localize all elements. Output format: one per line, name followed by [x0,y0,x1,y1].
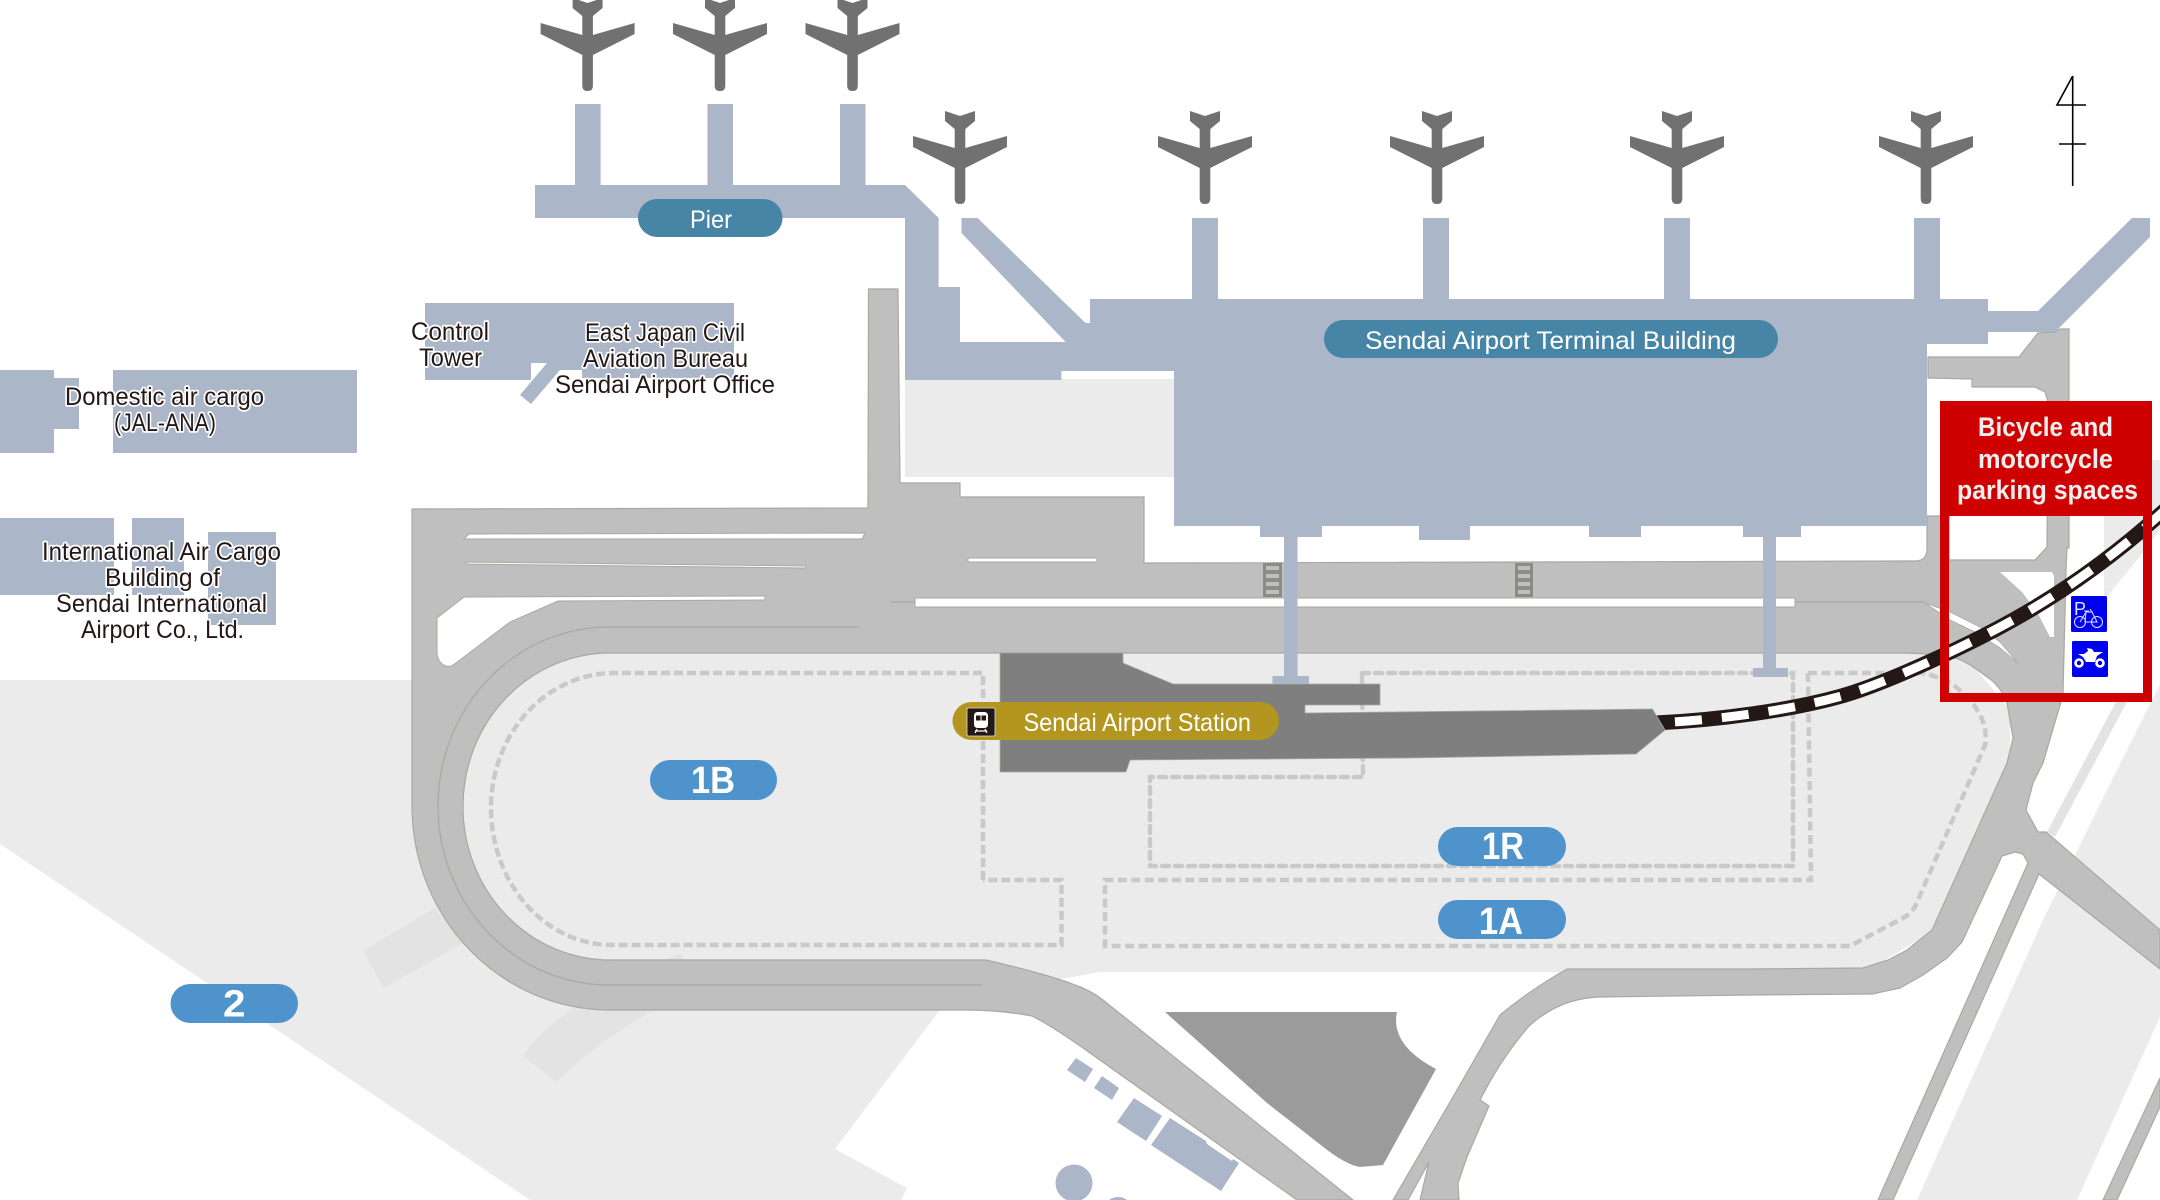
building: control tower and civil aviation bureau [425,303,734,404]
label: Control Tower: Control [411,318,489,346]
label: Domestic air cargo [65,383,264,437]
roads and apron [412,289,2160,1200]
covered walkway 2 [1753,537,1788,677]
pill: Sendai Airport Station [952,702,1279,740]
pill: Sendai Airport Station: Sendai Airport Station [1024,709,1251,737]
pill: terminal building: Sendai Airport Terminal Building [1365,327,1736,355]
icon: bicycle parking [2071,596,2107,632]
label: East Japan Civil Aviation Bureau: East Japan Civil [585,319,745,347]
pill: terminal building [1324,320,1778,358]
label: International Air Cargo: Airport Co., Ltd. [81,616,244,644]
label: East Japan Civil Aviation Bureau [555,319,775,399]
label: International Air Cargo: Building of [105,564,220,592]
label: Domestic air cargo: (JAL-ANA) [114,409,216,437]
label: Domestic air cargo: Domestic air cargo [65,383,264,411]
pill: parking 1B: 1B [691,760,735,802]
parking lot [1165,1012,1436,1167]
darker ground bands [363,700,2128,1082]
terminal building and pier [535,104,2150,540]
pill: parking 2 [170,984,298,1026]
covered walkway 1 [1272,537,1309,684]
small buildings south [1056,1058,1239,1200]
airport grounds: light grey land [0,379,2160,1200]
crosswalk ladders [1263,563,1533,597]
station building [1000,653,1665,772]
pill: Pier: Pier [690,206,732,234]
callout: bicycle and motorcycle parking: motorcycle [1978,444,2113,474]
pill: parking 1B [650,760,777,802]
label: East Japan Civil Aviation Bureau: Aviation Bureau [583,345,748,373]
icon: bicycle parking: P [2074,599,2086,619]
taxiway centre lines [438,602,1925,985]
pill: parking 2: 2 [223,984,246,1026]
label: Control Tower: Tower [419,344,482,372]
pill: Pier [638,199,782,237]
building: international air cargo [0,518,276,625]
label: International Air Cargo: Sendai International [56,590,267,618]
callout: bicycle and motorcycle parking [1940,401,2152,702]
aircraft at stands [541,0,1973,204]
callout: bicycle and motorcycle parking: parking spaces [1957,475,2138,505]
railway line [1655,510,2160,723]
pill: parking 1A [1438,900,1566,943]
pill: parking 1R: 1R [1482,826,1524,868]
runway boundary dashed lines [491,673,1986,946]
icon: train [967,708,995,736]
label: East Japan Civil Aviation Bureau: Sendai Airport Office [555,371,775,399]
building: domestic air cargo [0,370,357,453]
label: Control Tower [411,318,489,372]
icon: north arrow [2057,76,2086,186]
icon: motorcycle parking [2072,641,2108,677]
white islands in the apron [437,533,2054,666]
callout: bicycle and motorcycle parking: Bicycle and [1978,412,2113,442]
pill: parking 1R [1438,826,1566,868]
pill: parking 1A: 1A [1479,901,1523,943]
label: International Air Cargo: International Air Cargo [42,538,281,566]
label: International Air Cargo [42,538,281,644]
